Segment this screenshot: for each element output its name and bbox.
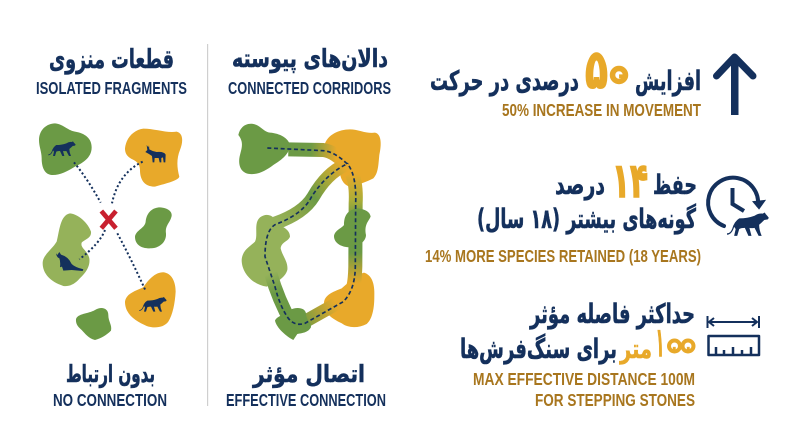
patch: green top left: [238, 124, 290, 174]
text: increase: افزایش: [635, 66, 701, 97]
number: 50: ۰: [615, 63, 627, 87]
corridor: bottom right: [302, 300, 343, 323]
panel: isolated fragments: [36, 45, 187, 410]
icon: wildcat: [139, 297, 167, 312]
patch: orange with deer: [125, 129, 182, 187]
text: English caption line 1: MAX EFFECTIVE DISTANCE 100M: [473, 369, 695, 389]
number: 100: ۱: [656, 320, 664, 366]
stat: 50% increase in movement: [430, 38, 753, 120]
icon: puma: [48, 141, 76, 156]
patch: light green with kangaroo: [43, 213, 91, 286]
caption: no connection (Persian): بدون ارتباط: [66, 360, 155, 388]
caption: effective connection (Persian): اتصال مؤثر: [252, 360, 365, 388]
panel: connected corridors: [226, 44, 391, 410]
number: 100: ۰: [670, 340, 679, 356]
text: English caption: 50% INCREASE IN MOVEMENT: [502, 100, 701, 120]
heading: connected corridors (Persian): دالان‌های پیوسته: [232, 44, 388, 74]
icon: up arrow: [716, 57, 753, 115]
patch: green right: [334, 208, 371, 247]
corridor: diagonal: [275, 165, 345, 223]
text: English caption line 2: FOR STEPPING STONES: [535, 390, 695, 410]
corridor: right vertical: [352, 173, 356, 287]
stat: max effective distance 100m: [460, 299, 759, 410]
patch: orange bottom right: [324, 273, 374, 327]
stat: 14% more species retained: [425, 153, 769, 266]
text: English caption: 14% MORE SPECIES RETAINED (18 YEARS): [425, 246, 701, 266]
icon: kangaroo: [56, 252, 83, 271]
patch: light green left: [242, 215, 290, 287]
dashed route: [265, 148, 356, 324]
number: 100: ۰: [684, 340, 693, 356]
icon: measuring arrow: [708, 316, 759, 328]
text: max effective distance: حداکثر فاصله مؤثر: [529, 299, 695, 330]
heading: connected corridors (English): CONNECTED CORRIDORS: [228, 78, 391, 98]
icon: red cross: [101, 211, 116, 228]
divider between map panels: [207, 44, 208, 406]
text: for stepping stones: برای سنگ‌فرش‌ها: [460, 333, 617, 365]
text: retain: حفظ: [653, 170, 697, 201]
patch: small green: [135, 207, 172, 248]
icon: ruler: [708, 336, 759, 355]
text: percent: درصد: [555, 170, 605, 201]
caption: no connection (English): NO CONNECTION: [53, 390, 167, 410]
patch: orange with wildcat: [125, 272, 176, 327]
patch: green bottom: [275, 308, 311, 340]
patch: small green bottom: [76, 308, 111, 340]
dashed paths: broken links: [74, 162, 146, 292]
text: percent in movement: درصدی در حرکت: [430, 66, 579, 97]
text: more species (18 years): گونه‌های بیشتر (۱۸ سال): [477, 203, 696, 235]
number: 14: ۱۴: [612, 153, 648, 209]
heading: isolated fragments (English): ISOLATED FRAGMENTS: [36, 78, 187, 98]
corridor: top: [288, 149, 347, 165]
map: isolated habitat patches: [39, 123, 182, 340]
map: connected patches and corridors: [238, 124, 381, 340]
text: meters: متر: [619, 334, 652, 365]
patch: orange top: [325, 129, 381, 187]
icon: clock with puma: [708, 178, 769, 236]
number: 50: ۵: [585, 38, 608, 101]
number: 100: [656, 320, 694, 366]
caption: effective connection (English): EFFECTIVE CONNECTION: [226, 390, 386, 410]
corridor: bottom left: [271, 273, 292, 323]
icon: deer: [145, 145, 166, 162]
heading: isolated fragments (Persian): قطعات منزوی: [49, 45, 174, 75]
patch: green with puma: [39, 123, 92, 175]
